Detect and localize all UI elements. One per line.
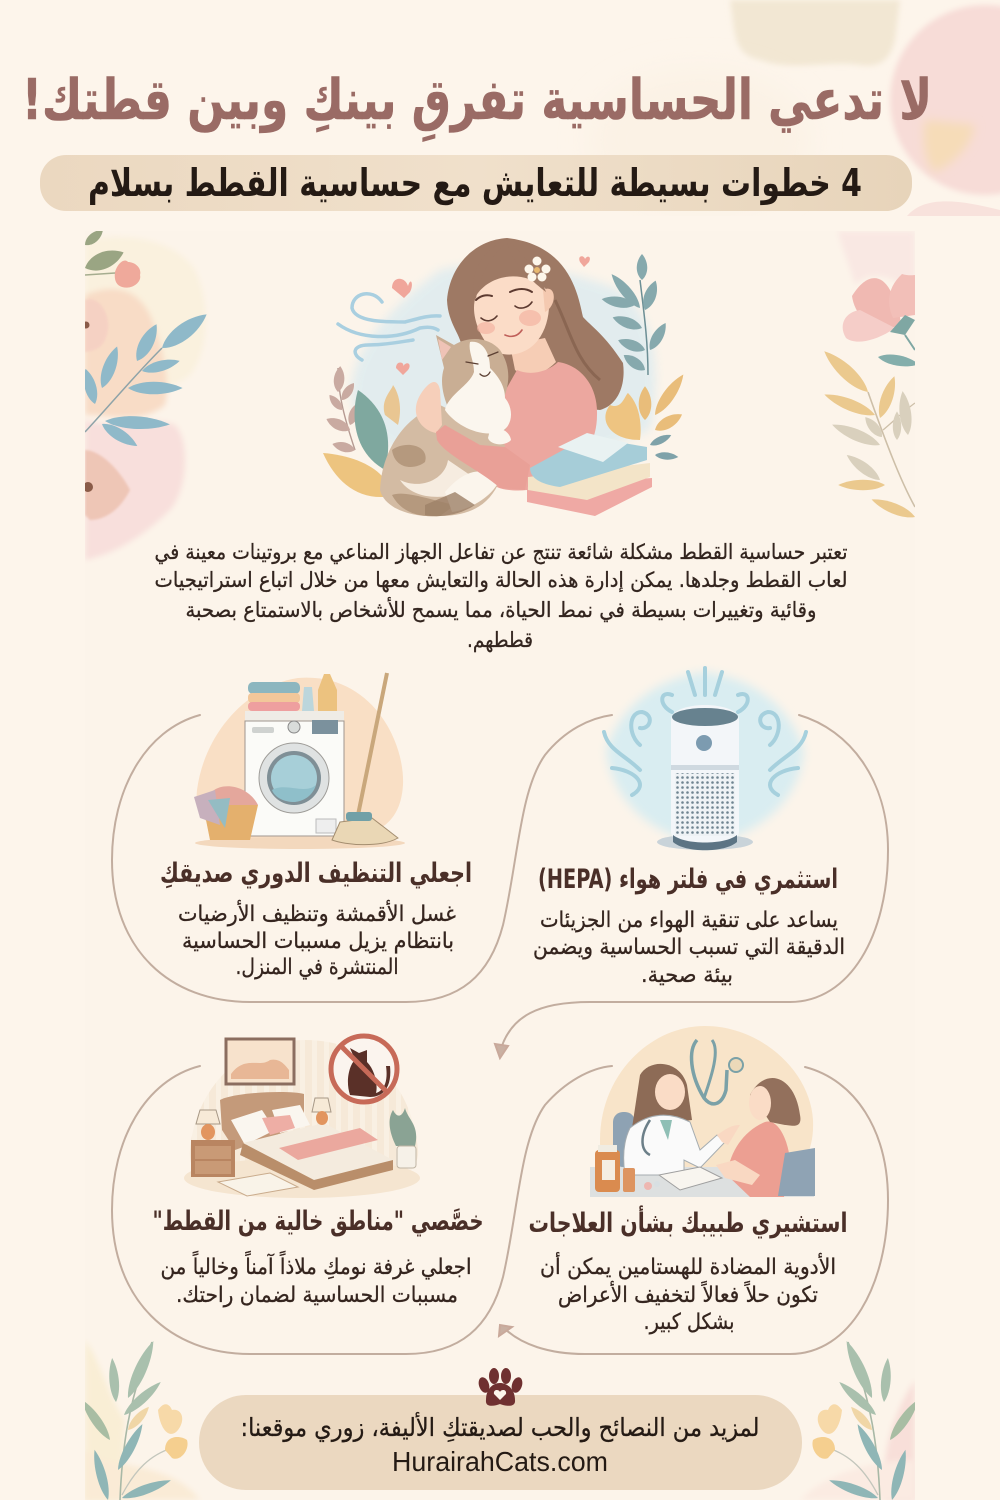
card heading: اجعلي التنظيف الدوري صديقكِ [160,858,472,889]
hair parting [473,240,546,300]
card heading: خصَّصي "مناطق خالية من القطط" [152,1206,484,1237]
bottom washes [85,1345,125,1464]
filter grill [675,773,735,836]
icon: washing machine and mop [194,673,405,849]
facial features [476,289,532,336]
bottom left branch [78,1339,188,1500]
card body [540,1252,836,1335]
wind swirl [338,294,440,360]
cat tail [445,471,500,512]
left foliage [323,366,400,497]
right wash and flower [841,232,914,280]
hearts [392,256,590,375]
subtitle pill [40,155,912,211]
card body: يساعد على تنقية الهواء من الجزيئات [540,908,838,933]
flower in hair [524,256,550,282]
icon: doctor consultation [590,1026,815,1197]
cat head and chest [436,335,508,431]
bed [243,1123,393,1180]
card body [533,908,845,988]
pale blue wash [351,265,656,470]
blue branch [85,348,162,432]
cat body [380,405,505,516]
card body: الدقيقة التي تسبب الحساسية ويضمن [533,935,845,960]
icon: tulip [115,260,140,288]
intro paragraph: وقائية وتغييرات بسيطة في نمط الحياة، مما يسمح للأشخاص بالاستمتاع بصحبة [186,597,816,622]
hair [447,238,624,410]
neck [510,338,556,375]
card body: اجعلي غرفة نومكِ ملاذاً آمناً وخالياً من [160,1250,472,1280]
arm and hand [416,382,442,433]
hero illustration: woman hugging cat [323,238,688,516]
bottom right card outline [502,1067,888,1354]
intro paragraph [154,540,848,653]
top right card outline [500,715,888,1052]
face [474,276,549,355]
icon: air purifier [604,668,806,850]
card body: تكون حلاً فعالاً لتخفيف الأعراض [558,1280,818,1308]
icon: bedroom with no-cat sign [184,1036,420,1198]
towels stack [527,433,652,516]
panel decorations: watercolor florals [78,226,922,1500]
arrow: bottom card return [499,1325,512,1336]
card body: بانتظام يزيل مسببات الحساسية [182,929,454,954]
card heading: استشيري طبيبك بشأن العلاجات [528,1205,848,1239]
card body: المنتشرة في المنزل. [236,955,398,980]
step card: HEPA air filter [533,668,845,988]
arrow: top row to bottom row [495,1044,508,1058]
bottom right branch [812,1339,922,1500]
card body: الأدوية المضادة للهستامين يمكن أن [540,1252,836,1280]
card outlines and arrows [112,715,888,1354]
card body [160,1250,472,1308]
intro paragraph: لعاب القطط وجلدها. يمكن إدارة هذه الحالة والتعايش معها من خلال اتباع استراتيجيات [154,568,848,593]
footer pill: HurairahCats.com [392,1446,608,1477]
footer pill: لمزيد من النصائح والحب لصديقتكِ الأليفة، زوري موقعنا: [240,1411,760,1443]
intro paragraph: تعتبر حساسية القطط مشكلة شائعة تنتج عن تفاعل الجهاز المناعي مع بروتينات معينة في [154,540,848,564]
main panel [85,231,915,1500]
left washes [85,237,206,393]
card body: بشكل كبير. [644,1310,734,1335]
sweater [495,362,597,491]
step card: regular cleaning [160,673,472,980]
bottom row outline [112,1066,612,1354]
right foliage [601,254,688,461]
step card: see a doctor [528,1026,848,1335]
header watercolor wash [730,0,1000,216]
card heading: استثمري في فلتر هواء (HEPA) [538,864,838,895]
top row outline [112,715,612,1002]
card body [178,900,456,980]
right foliage [868,392,915,507]
intro paragraph: قططهم. [467,628,533,653]
footer pill [199,1395,802,1490]
icon: paw print [477,1368,524,1406]
card body: مسببات الحساسية لضمان راحتك. [176,1283,458,1308]
step card: cat-free zones [152,1036,484,1308]
card body: بيئة صحية. [641,963,733,988]
card body: غسل الأقمشة وتنظيف الأرضيات [178,900,456,927]
